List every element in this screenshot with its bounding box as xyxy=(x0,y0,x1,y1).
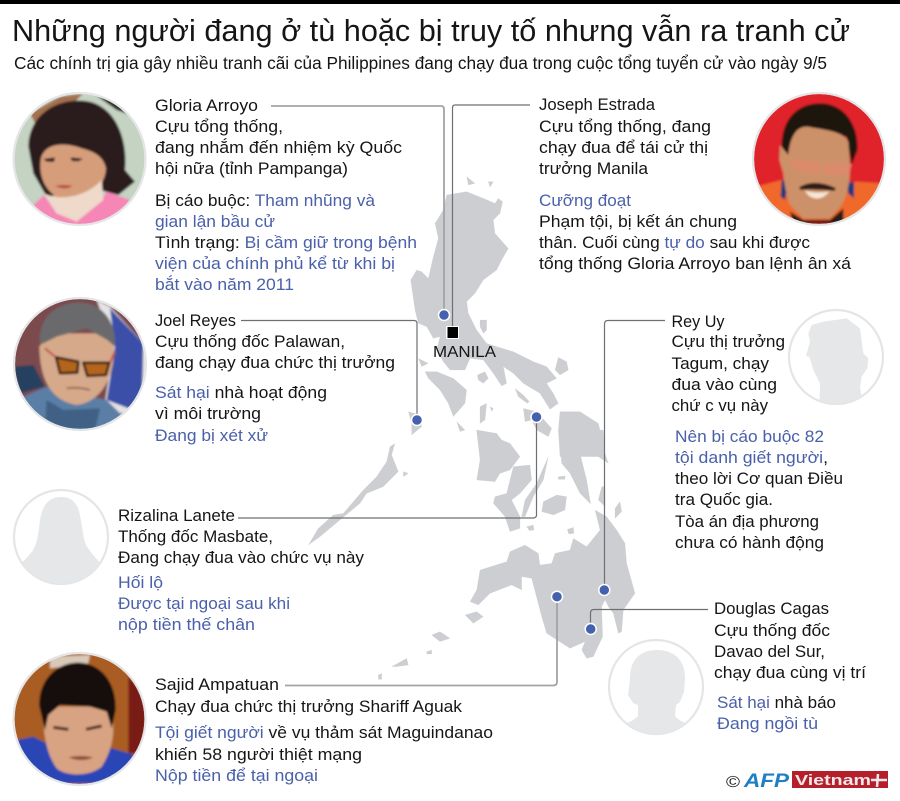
text: Douglas Cagas: Douglas Cagas xyxy=(714,599,829,618)
map marker: Ampatuan xyxy=(552,591,562,602)
text: Joel Reyes: Joel Reyes xyxy=(155,311,236,330)
text: Joel Reyes: Cựu thống đốc Palawan, xyxy=(155,332,345,351)
connector: Ampatuan xyxy=(285,597,557,686)
text: Gloria Arroyo: Cựu tổng thống, xyxy=(155,117,283,136)
text: Rey Uy: Rey Uy xyxy=(672,312,725,331)
text: Rizalina Lanete: Thống đốc Masbate, xyxy=(118,527,273,546)
connector: Estrada xyxy=(452,105,530,330)
text: Sajid Ampatuan: Nộp tiền để tại ngoại xyxy=(155,766,318,785)
text: Rey Uy: tội danh giết người , xyxy=(675,448,828,467)
text: Rizalina Lanete: Được tại ngoại sau khi xyxy=(118,594,290,613)
text: Rey Uy: Tòa án địa phương xyxy=(675,512,819,531)
portrait placeholder: Douglas Cagas xyxy=(609,640,703,738)
text: Rey Uy: chứ c vụ này xyxy=(672,396,768,415)
text: Sajid Ampatuan: Chạy đua chức thị trưởng Shariff Aguak xyxy=(155,697,463,716)
map: Philippines xyxy=(308,177,635,679)
text: Rey Uy: chưa có hành động xyxy=(675,533,824,552)
text: Douglas Cagas: chạy đua cùng vị trí xyxy=(714,663,866,682)
map marker: Manila xyxy=(433,326,496,361)
title: Những người đang ở tù hoặc bị truy tố nhưng vẫn ra tranh cử xyxy=(12,13,850,48)
text: Rey Uy xyxy=(672,312,843,552)
text: Sajid Ampatuan: khiến 58 người thiệt mạng xyxy=(155,745,362,764)
text: Rey Uy: Cựu thị trưởng xyxy=(672,332,785,351)
text: Rizalina Lanete: Rizalina Lanete xyxy=(118,506,235,525)
text: Sajid Ampatuan xyxy=(155,675,493,785)
credit: AFP and Vietnam+ logos: AFP xyxy=(743,771,789,792)
text: Douglas Cagas xyxy=(714,599,866,733)
text: Joseph Estrada: chạy đua để tái cử thị xyxy=(539,138,708,157)
text: Rey Uy: Tagum, chạy xyxy=(672,354,769,373)
credit: AFP and Vietnam+ logos: Vietnam xyxy=(795,772,871,789)
text: Joseph Estrada: thân. Cuối cùng tự do sau khi được xyxy=(539,233,811,252)
credit: AFP and Vietnam+ logos xyxy=(726,771,888,792)
portrait placeholder: Rey Uy xyxy=(789,310,883,407)
text: Gloria Arroyo: đang nhắm đến nhiệm kỳ Quốc xyxy=(155,138,403,157)
map marker: Reyes xyxy=(412,414,422,426)
map marker: Manila: MANILA xyxy=(433,344,496,361)
map marker: Cagas xyxy=(585,624,596,634)
text: Gloria Arroyo: Gloria Arroyo xyxy=(155,96,258,115)
portrait: Joseph Estrada xyxy=(750,90,890,230)
text: Gloria Arroyo: Tình trạng: Bị cầm giữ trong bệnh xyxy=(155,233,417,252)
text: Gloria Arroyo: viện của chính phủ kể từ khi bị xyxy=(155,254,395,273)
text: Joel Reyes: Sát hại nhà hoạt động xyxy=(155,383,327,402)
text: Rizalina Lanete xyxy=(118,506,364,634)
text: Rey Uy: tra Quốc gia. xyxy=(675,490,773,509)
text: Joseph Estrada xyxy=(539,95,852,273)
text: Sajid Ampatuan: Tội giết người về vụ thảm sát Maguindanao xyxy=(155,723,493,742)
text: Douglas Cagas: Cựu thống đốc xyxy=(714,621,831,640)
text: Sajid Ampatuan: Sajid Ampatuan xyxy=(155,675,279,694)
text: Douglas Cagas: Sát hại nhà báo xyxy=(717,693,836,712)
text: Douglas Cagas: Davao del Sur, xyxy=(714,642,825,661)
portrait: Sajid Ampatuan xyxy=(10,650,150,790)
text: Joel Reyes: vì môi trường xyxy=(155,404,261,423)
text: Gloria Arroyo: bắt vào năm 2011 xyxy=(155,275,294,294)
connector: Rey Uy xyxy=(604,320,665,590)
text: Joel Reyes xyxy=(155,311,395,445)
text: Joseph Estrada: Joseph Estrada xyxy=(539,95,656,114)
connector: Lanete xyxy=(238,417,536,518)
connector: Arroyo xyxy=(271,106,444,315)
portrait placeholder: Rizalina Lanete xyxy=(14,490,108,586)
text: Rey Uy: theo lời Cơ quan Điều xyxy=(675,469,843,488)
text: Joseph Estrada: Phạm tội, bị kết án chung xyxy=(539,212,737,231)
text: Joseph Estrada: tổng thống Gloria Arroyo ban lệnh ân xá xyxy=(539,254,852,273)
text: Gloria Arroyo: hội nữa (tỉnh Pampanga) xyxy=(155,159,348,178)
map marker: Arroyo xyxy=(438,310,450,320)
text: Douglas Cagas: Đang ngồi tù xyxy=(717,714,818,733)
text: Joseph Estrada: trưởng Manila xyxy=(539,159,649,178)
connector: Reyes xyxy=(241,320,417,420)
text: Rizalina Lanete: Đang chạy đua vào chức vụ này xyxy=(118,548,364,567)
text: Rey Uy: đua vào cùng xyxy=(672,375,777,394)
portrait: Gloria Arroyo xyxy=(10,90,150,230)
map marker: Rey Uy xyxy=(599,584,610,596)
text: Joel Reyes: đang chạy đua chức thị trưởng xyxy=(155,353,395,372)
subtitle: Các chính trị gia gây nhiều tranh cãi của Philippines đang chạy đua trong cuộc tổng tuyển cử vào ngày 9/5 xyxy=(14,53,827,73)
text: Gloria Arroyo: Bị cáo buộc: Tham nhũng và xyxy=(155,191,376,210)
credit: AFP and Vietnam+ logos: © xyxy=(726,774,740,791)
text: Gloria Arroyo xyxy=(155,96,417,294)
map marker: Lanete xyxy=(531,412,542,422)
text: Joseph Estrada: Cựu tổng thống, đang xyxy=(539,117,711,136)
portrait: Joel Reyes xyxy=(10,297,150,437)
text: Rizalina Lanete: Hối lộ xyxy=(118,573,163,592)
text: Rizalina Lanete: nộp tiền thế chân xyxy=(118,615,255,634)
text: Joel Reyes: Đang bị xét xử xyxy=(155,426,268,445)
text: Joseph Estrada: Cưỡng đoạt xyxy=(539,191,631,210)
text: Rey Uy: Nên bị cáo buộc 82 xyxy=(675,427,824,446)
connector: Cagas xyxy=(590,610,708,629)
text: Gloria Arroyo: gian lận bầu cử xyxy=(155,212,275,231)
